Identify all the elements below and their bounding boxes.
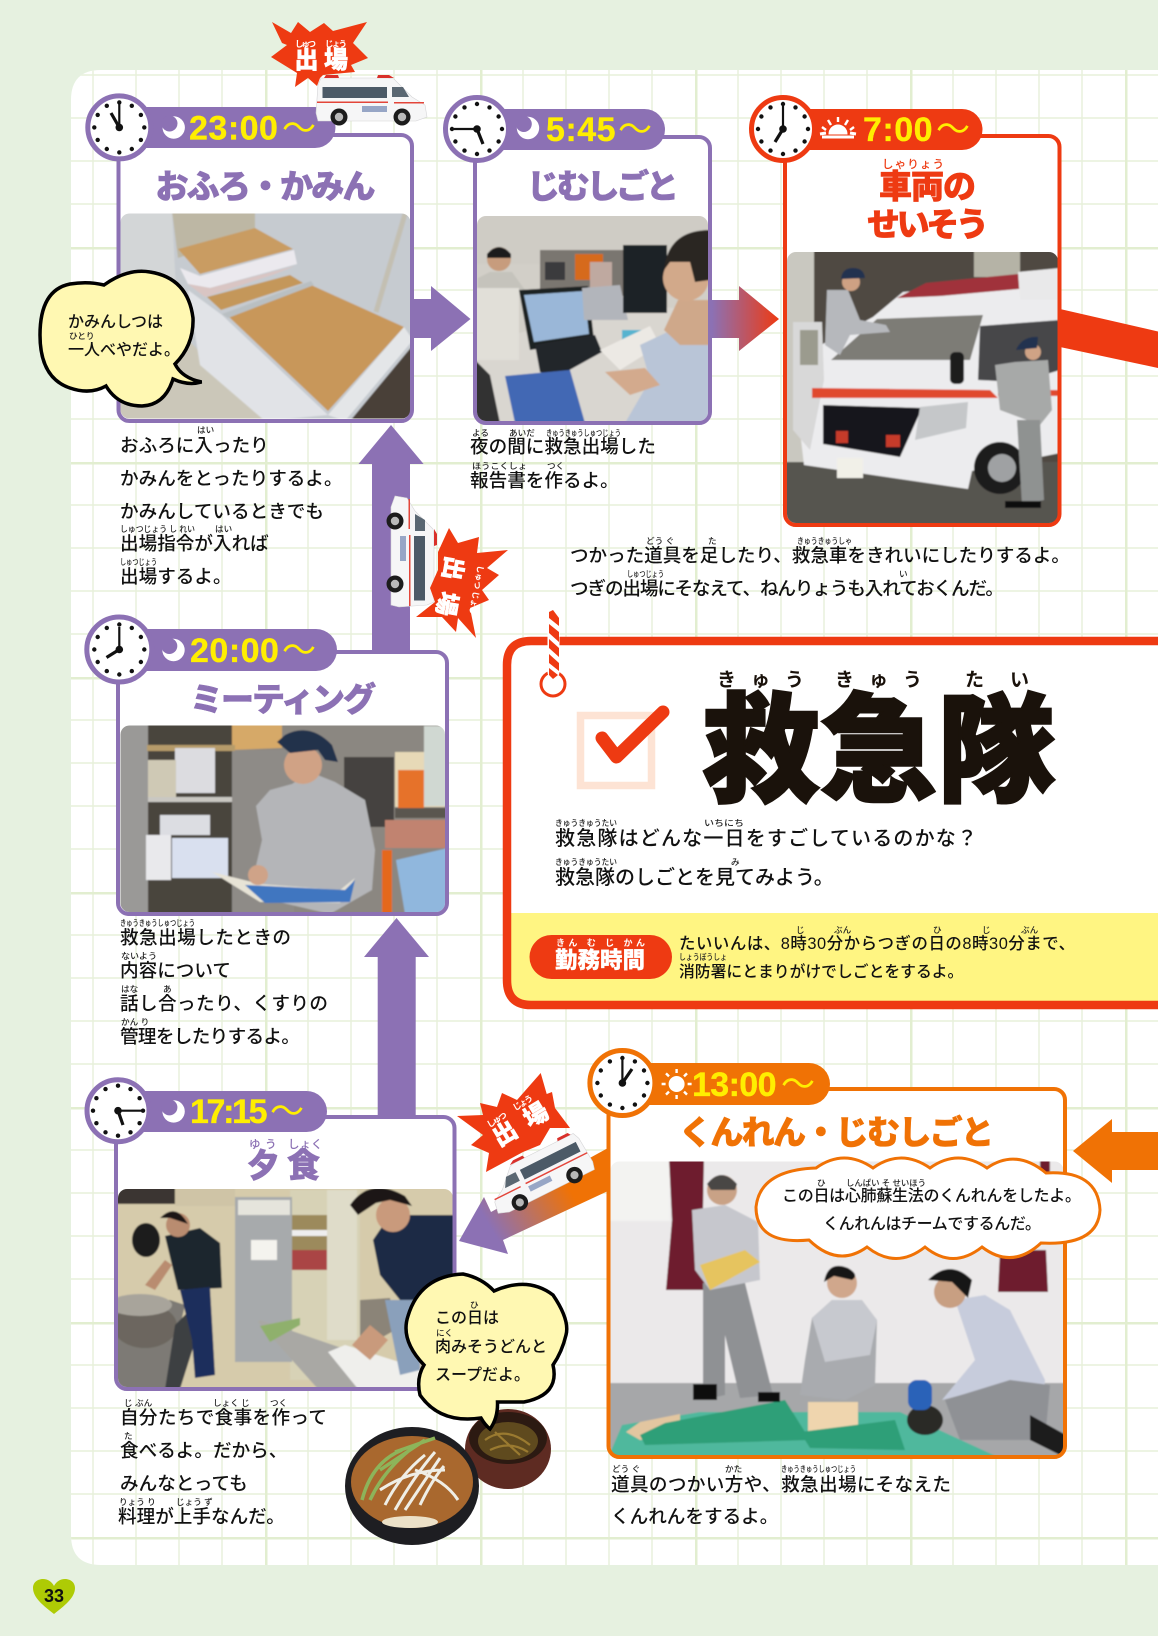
card outline bbox=[118, 135, 412, 421]
heading ruby: た bbox=[965, 669, 984, 691]
body text: 13:00: どう ぐ bbox=[612, 1464, 640, 1474]
body text: 7:00: しゅつじょう bbox=[627, 569, 664, 579]
working hours band bbox=[507, 913, 1158, 1005]
title: dinner: ゆ bbox=[249, 1138, 260, 1151]
body text: 7:00: い bbox=[899, 569, 908, 579]
body text: 17:15: 料理が上手なんだ。 bbox=[118, 1506, 285, 1527]
photo: nap room bed bbox=[118, 211, 413, 421]
orange arrow entering 13:00 card bbox=[1073, 1119, 1158, 1183]
photo: CPR training bbox=[608, 1159, 1066, 1458]
ambulance on vertical arrow bbox=[386, 496, 437, 607]
callout: dinner menu: この日は bbox=[435, 1310, 499, 1327]
time label: ～ bbox=[282, 632, 316, 670]
card: 13:00 training bbox=[590, 1050, 1067, 1459]
time pill bbox=[119, 629, 337, 671]
intro text: 救急隊はどんな一日をすごしているのかな？ bbox=[555, 827, 977, 850]
hours text: じ bbox=[796, 925, 805, 935]
clock 23:00 bbox=[88, 96, 151, 159]
cloud callout: しんぱい そ せいほう bbox=[846, 1178, 926, 1188]
body text: 7:00 bbox=[570, 536, 1070, 599]
body text: 23:00: 出場するよ。 bbox=[120, 566, 232, 587]
time label: 7:00 bbox=[863, 111, 933, 149]
photo: office desk bbox=[475, 214, 710, 423]
body text: 5:45 bbox=[470, 428, 656, 491]
time pill bbox=[118, 1091, 327, 1132]
body text: 17:15 bbox=[118, 1398, 327, 1527]
body text: 17:15: じょう ず bbox=[176, 1497, 213, 1507]
title: vehicle cleaning: せいそう bbox=[867, 206, 989, 243]
heading ruby: ゅ bbox=[869, 670, 888, 691]
body text: 5:45: ほうこくしょ bbox=[472, 461, 527, 471]
body text: 7:00: つかった道具を足したり、救急車をきれいにしたりするよ。 bbox=[570, 545, 1070, 566]
intro text: いちにち bbox=[704, 818, 744, 828]
intro text: 救急隊のしごとを見てみよう。 bbox=[555, 866, 834, 889]
title: vehicle cleaning bbox=[867, 158, 989, 243]
body text: 7:00: きゅうきゅうしゃ bbox=[797, 536, 852, 546]
burst: dispatch top: じょう bbox=[325, 39, 347, 49]
hours text: ぶん bbox=[1021, 925, 1039, 935]
callout: single room bbox=[40, 271, 202, 406]
photo: kitchen bbox=[108, 1187, 455, 1389]
title: おふろ・かみん bbox=[156, 168, 376, 205]
time label bbox=[692, 1066, 815, 1104]
clock 20:00 bbox=[87, 617, 152, 682]
time pill bbox=[477, 109, 665, 150]
card: 20:00 meeting bbox=[87, 617, 449, 916]
photo: soup bowl bbox=[465, 1409, 551, 1489]
time label bbox=[190, 1093, 304, 1131]
callout: dinner menu: 肉みそうどんと bbox=[435, 1338, 547, 1356]
burst: dispatch left: しゅつ じょう bbox=[467, 565, 485, 616]
body text: 20:00 bbox=[120, 918, 328, 1047]
body text: 13:00: きゅうきゅうしゅつじょう bbox=[781, 1464, 856, 1474]
body text: 17:15: 食べるよ。だから、 bbox=[120, 1440, 287, 1461]
card outline bbox=[116, 1117, 454, 1389]
burst: dispatch right: しゅつ bbox=[485, 1110, 509, 1130]
body text: 20:00: ないよう bbox=[121, 951, 157, 961]
icon: moon bbox=[161, 638, 185, 661]
body text: 5:45: きゅうきゅうしゅつじょう bbox=[546, 428, 621, 438]
cloud callout: ひ bbox=[817, 1178, 826, 1188]
photo: minced meat udon bbox=[345, 1427, 479, 1545]
body text: 23:00: かみんをとったりするよ。 bbox=[120, 468, 343, 489]
body text: 20:00: 話し合ったり、くすりの bbox=[120, 993, 328, 1014]
burst: dispatch left: 出場 bbox=[431, 554, 468, 618]
time label: ～ bbox=[618, 111, 652, 149]
heading ruby: き bbox=[835, 669, 854, 691]
body text: 23:00: しゅつじょう bbox=[120, 557, 157, 567]
body text: 23:00: おふろに入ったり bbox=[120, 435, 269, 456]
time label bbox=[863, 111, 970, 149]
body text: 23:00 bbox=[120, 425, 343, 587]
arrow: 23:00 to 5:45 bbox=[412, 286, 470, 351]
body text: 20:00: きゅうきゅうしゅつじょう bbox=[120, 918, 195, 928]
body text: 7:00: どう ぐ bbox=[646, 536, 674, 546]
arrow: 20:00 up to 23:00 bbox=[358, 425, 424, 652]
callout: dinner menu bbox=[406, 1274, 567, 1429]
body text: 13:00: 道具のつかい方や、救急出場にそなえた bbox=[611, 1474, 951, 1495]
ambulance on diagonal arrow bbox=[480, 1129, 598, 1221]
body text: 23:00: 出場指令が入れば bbox=[120, 533, 269, 554]
title: ミーティング bbox=[190, 681, 376, 718]
time label: ～ bbox=[282, 110, 316, 148]
body text: 17:15: た bbox=[124, 1431, 133, 1441]
burst: dispatch left bbox=[416, 528, 508, 638]
burst: dispatch top bbox=[271, 22, 368, 87]
body text: 7:00: た bbox=[708, 536, 717, 546]
heading ruby: う bbox=[903, 670, 922, 691]
time label: 17:15 bbox=[190, 1093, 268, 1131]
icon: moon bbox=[162, 116, 185, 139]
card outline bbox=[118, 652, 447, 914]
title: vehicle cleaning: しゃりょう bbox=[882, 158, 944, 171]
time label: 13:00 bbox=[692, 1066, 777, 1104]
cloud callout bbox=[756, 1158, 1100, 1258]
time pill bbox=[785, 109, 982, 150]
time label: 23:00 bbox=[189, 110, 278, 148]
icon: sun bbox=[662, 1069, 692, 1099]
card: 5:45 paperwork bbox=[446, 98, 712, 425]
time label: 20:00 bbox=[190, 632, 279, 670]
time label: ～ bbox=[936, 111, 970, 149]
callout: dinner menu: スープだよ。 bbox=[435, 1366, 530, 1384]
photo: ambulance cleaning bbox=[785, 250, 1060, 525]
card outline bbox=[608, 1089, 1065, 1457]
hours text: ぶん bbox=[834, 925, 852, 935]
body text: 17:15: しょく じ bbox=[213, 1398, 250, 1408]
intro text: み bbox=[731, 857, 740, 867]
heading ruby bbox=[717, 669, 1029, 691]
body text: 13:00: くんれんをするよ。 bbox=[611, 1506, 778, 1527]
card: 23:00 bath and nap bbox=[88, 96, 414, 423]
body text: 13:00 bbox=[611, 1464, 951, 1527]
badge: working hours: 勤務時間 bbox=[555, 948, 645, 973]
title: dinner: 夕食 bbox=[247, 1147, 320, 1184]
time label: ～ bbox=[270, 1093, 304, 1131]
hours text: しょうぼうしょ bbox=[679, 952, 727, 962]
burst: dispatch right: じょう bbox=[511, 1093, 535, 1113]
body text: 20:00: 管理をしたりするよ。 bbox=[120, 1026, 300, 1047]
heading ruby: き bbox=[717, 669, 736, 691]
title: dinner: う bbox=[265, 1138, 276, 1151]
body text: 17:15: つく bbox=[270, 1398, 287, 1408]
body text: 23:00: かみんしているときでも bbox=[120, 501, 324, 522]
body text: 5:45: 夜の間に救急出場した bbox=[470, 436, 656, 457]
heading ruby: う bbox=[785, 670, 804, 691]
clock 7:00 bbox=[752, 98, 814, 160]
body text: 5:45: 報告書を作るよ。 bbox=[470, 470, 619, 491]
arrow: 13:00 to 17:15 bbox=[459, 1148, 608, 1254]
arrow: 17:15 up to 20:00 bbox=[364, 918, 429, 1118]
card outline bbox=[785, 136, 1060, 525]
body text: 13:00: かた bbox=[725, 1464, 742, 1474]
body text: 20:00: かん り bbox=[121, 1017, 149, 1027]
body text: 5:45: つく bbox=[547, 461, 564, 471]
title: vehicle cleaning: 車両の bbox=[879, 168, 976, 205]
intro text bbox=[555, 818, 977, 889]
body text: 5:45: あいだ bbox=[509, 428, 535, 438]
card outline bbox=[475, 137, 710, 423]
clock 5:45 bbox=[446, 98, 508, 160]
card: 17:15 dinner bbox=[87, 1080, 456, 1391]
body text: 23:00: はい bbox=[215, 524, 232, 534]
callout: dinner menu: ひ bbox=[470, 1300, 479, 1310]
arrow: 5:45 to 7:00 bbox=[710, 286, 779, 351]
hours text: たいいんは、8時30分からつぎの日の8時30分まで、 bbox=[679, 935, 1075, 953]
callout: dinner menu: にく bbox=[436, 1328, 453, 1338]
icon: moon bbox=[516, 116, 539, 139]
icon: sunrise bbox=[820, 117, 856, 137]
page number heart: 33 bbox=[44, 1586, 64, 1606]
burst: dispatch top: 場 bbox=[324, 47, 348, 74]
callout: single room: 一人べやだよ。 bbox=[68, 341, 180, 359]
time pill bbox=[622, 1063, 830, 1105]
time label: 5:45 bbox=[546, 111, 616, 149]
cloud callout: この日は心肺蘇生法のくんれんをしたよ。 bbox=[782, 1187, 1081, 1205]
rope and ring bbox=[541, 610, 565, 696]
ambulance top bbox=[316, 75, 427, 126]
intro text: きゅうきゅうたい bbox=[555, 857, 617, 867]
hours text: 消防署にとまりがけでしごとをするよ。 bbox=[679, 962, 963, 981]
title: じむしごと bbox=[527, 168, 679, 205]
body text: 17:15: りょう り bbox=[119, 1497, 156, 1507]
badge: working hours: きん む じ かん bbox=[556, 938, 645, 948]
burst: dispatch top: 出 bbox=[294, 47, 318, 74]
callout: single room: かみんしつは bbox=[68, 314, 163, 331]
body text: 23:00: はい bbox=[197, 425, 214, 435]
burst: dispatch right bbox=[457, 1073, 570, 1172]
hours text: じ bbox=[982, 925, 991, 935]
card: 7:00 vehicle cleaning bbox=[752, 98, 1062, 527]
burst: dispatch top: しゅつ bbox=[295, 39, 316, 49]
hours text bbox=[679, 925, 1075, 981]
body text: 17:15: みんなとっても bbox=[120, 1473, 248, 1494]
clock 13:00 bbox=[590, 1050, 655, 1116]
heading ruby: い bbox=[1010, 670, 1029, 691]
clock 17:15 bbox=[87, 1080, 149, 1142]
body text: 23:00: しゅつじょう し れい bbox=[120, 524, 195, 534]
title: dinner: しょく bbox=[288, 1138, 322, 1151]
time label bbox=[189, 110, 316, 148]
page number heart bbox=[33, 1579, 75, 1614]
body text: 20:00: あ bbox=[163, 984, 172, 994]
main panel: 救急隊 bbox=[507, 610, 1158, 1005]
callout: single room: ひとり bbox=[69, 331, 95, 341]
heading: 救急隊 bbox=[702, 686, 1055, 818]
badge: working hours bbox=[530, 935, 672, 979]
intro text: きゅうきゅうたい bbox=[555, 818, 617, 828]
cloud callout: くんれんはチームでするんだ。 bbox=[823, 1215, 1041, 1233]
heading ruby: ゅ bbox=[751, 670, 770, 691]
body text: 20:00: 救急出場したときの bbox=[120, 927, 291, 948]
time label: ～ bbox=[781, 1066, 815, 1104]
red band arrow leaving 7:00 card bbox=[1060, 309, 1158, 368]
hours text: ひ bbox=[933, 925, 942, 935]
time label bbox=[546, 111, 652, 149]
body text: 17:15: じ ぶん bbox=[124, 1398, 153, 1408]
icon: check box bbox=[580, 712, 663, 786]
icon: moon bbox=[161, 1099, 185, 1123]
burst: dispatch right: 出場 bbox=[488, 1098, 554, 1152]
title: くんれん・じむしごと bbox=[679, 1114, 994, 1151]
photo: storage room bbox=[118, 723, 448, 914]
time pill bbox=[119, 107, 336, 148]
body text: 20:00: 内容について bbox=[120, 960, 231, 981]
body text: 20:00: はな bbox=[121, 984, 139, 994]
body text: 5:45: よる bbox=[472, 428, 489, 438]
body text: 7:00: つぎの出場にそなえて、ねんりょうも入れておくんだ。 bbox=[570, 578, 1004, 599]
body text: 17:15: 自分たちで食事を作って bbox=[120, 1407, 327, 1428]
